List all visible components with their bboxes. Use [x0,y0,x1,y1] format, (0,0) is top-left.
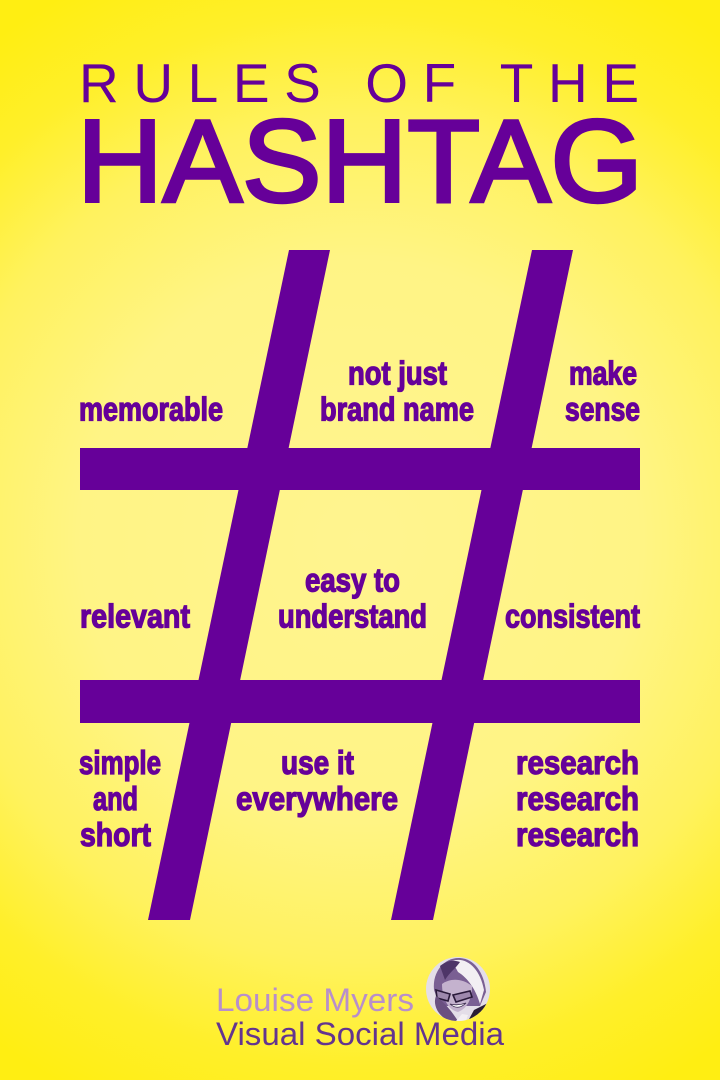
rule: simple and short: simple [79,744,161,781]
rule: simple and short: and [93,780,138,817]
footer brand [216,957,504,1052]
title line: rules of the: RULES OF THE [79,52,639,114]
rule: relevant: relevant [80,598,190,634]
brand name: Visual Social Media [216,1016,504,1052]
rule: make sense: sense [565,390,640,428]
rule: memorable: memorable [79,390,223,428]
rule: research research research: research [516,780,639,817]
rule: consistent: consistent [505,598,640,634]
rule: simple and short: short [80,816,151,853]
glasses [436,990,472,1002]
rule: make sense: make [569,354,637,392]
rule: research research research: research [516,816,639,853]
rule: not just brand name: not just [348,354,447,392]
rule: research research research: research [516,744,639,781]
title [77,52,643,226]
rule: use it everywhere [236,744,398,817]
rule: use it everywhere: use it [281,744,354,781]
rule: research research research [516,744,639,853]
rule: not just brand name [320,354,474,428]
title line: hashtag: HASHTAG [77,96,643,226]
icon: author portrait [426,957,490,1021]
rule: use it everywhere: everywhere [236,780,398,817]
rule: easy to understand: easy to [305,562,400,598]
rule: not just brand name: brand name [320,390,474,428]
rule: easy to understand [278,562,427,634]
hash symbol [80,250,640,920]
author name: Louise Myers [216,982,414,1018]
rule: make sense [565,354,640,428]
rule: easy to understand: understand [278,598,427,634]
rule: simple and short [79,744,161,853]
